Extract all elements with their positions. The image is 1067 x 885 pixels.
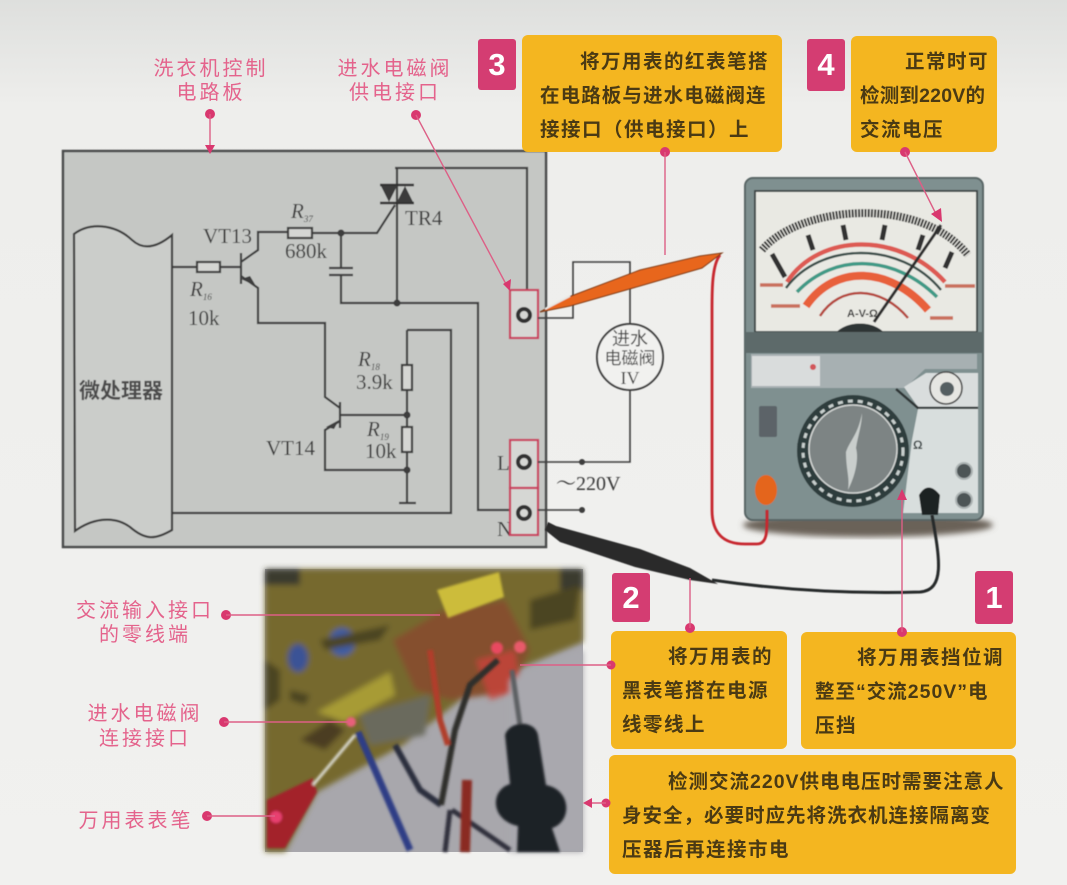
label: valve connection port: 连接接口 [99, 727, 191, 750]
component labels: N [497, 517, 512, 541]
microprocessor block [74, 226, 172, 537]
badge 2 [612, 573, 650, 622]
badge 4: 4 [817, 47, 835, 82]
label: meter probe [78, 809, 275, 832]
component labels: 10k [188, 306, 220, 330]
callout 4: 检测到220V的 [860, 84, 985, 107]
callout 3: 将万用表的红表笔搭 [580, 50, 769, 73]
zero adjust knob [930, 372, 962, 404]
lower control panel [751, 354, 978, 513]
callout 3 [522, 35, 782, 152]
callout 2: 线零线上 [622, 714, 706, 736]
safety callout: 检测交流220V供电电压时需要注意人 [668, 770, 1005, 793]
label: valve supply port: 供电接口 [349, 81, 441, 104]
component labels: 19 [380, 432, 389, 442]
label: control board [154, 57, 268, 154]
resistors [197, 228, 412, 452]
lower control panel: V [797, 442, 805, 454]
220V label: ～220V [556, 473, 621, 495]
badge 1: 1 [985, 580, 1003, 615]
pointer from callout 4 to needle [900, 147, 942, 222]
red probe body [267, 778, 317, 848]
multimeter [743, 178, 993, 537]
callout 1: 将万用表挡位调 [857, 646, 1004, 669]
safety callout: 压器后再连接市电 [622, 838, 790, 861]
callout 4: 正常时可 [905, 51, 989, 73]
label: neutral input terminal [76, 599, 440, 646]
badge 4 [807, 39, 845, 91]
component labels: TR4 [405, 206, 443, 230]
triac TR4 [380, 185, 414, 203]
panel: washing machine control circuit board [63, 151, 546, 547]
needle [874, 225, 941, 322]
photo: real circuit board with probes [265, 569, 583, 852]
callout 1: 整至“交流250V”电 [815, 680, 989, 703]
callout 1 [801, 632, 1016, 749]
component labels: 680k [285, 239, 328, 263]
meter scale window [755, 191, 977, 334]
external circuit with inlet valve [538, 262, 663, 513]
badge 2: 2 [622, 580, 640, 615]
label: valve supply port: 进水电磁阀 [338, 57, 452, 80]
black test lead [545, 515, 939, 592]
callout 3: 在电路板与进水电磁阀连 [540, 85, 767, 107]
component labels: VT13 [203, 224, 252, 248]
meter scale window: A-V-Ω [847, 308, 878, 320]
pointer from safety callout to photo [583, 798, 610, 808]
badge 1 [975, 571, 1013, 624]
label: valve supply port [338, 57, 511, 291]
pointer from callout 2 to photo [520, 660, 616, 670]
lower control panel: Ω [913, 438, 923, 452]
yellow capacitor [437, 572, 504, 618]
callout 3: 接接口（供电接口）上 [540, 119, 750, 141]
circuit wiring [172, 168, 527, 513]
terminals [510, 290, 538, 535]
component labels: 18 [371, 362, 380, 372]
label: valve connection port [88, 702, 350, 750]
inlet solenoid valve symbol: IV [620, 368, 640, 388]
callout 4: 交流电压 [860, 118, 944, 141]
component labels [188, 199, 512, 541]
microprocessor block: 微处理器 [79, 380, 163, 403]
component labels: R [367, 417, 380, 441]
inlet solenoid valve symbol: 进水 [612, 329, 648, 349]
rotary range dial [797, 395, 909, 507]
callout 1: 压挡 [815, 715, 857, 737]
callout 4 [851, 36, 997, 152]
pointer from callout 3 to red probe [660, 147, 670, 255]
component labels: 37 [303, 214, 313, 224]
inlet solenoid valve symbol: 电磁阀 [604, 349, 656, 368]
component labels: L [497, 451, 510, 475]
component labels: VT14 [266, 436, 315, 460]
component labels: 3.9k [356, 370, 393, 394]
safety callout [609, 755, 1016, 874]
component labels: R [190, 277, 203, 301]
safety callout: 身安全，必要时应先将洗衣机连接隔离变 [622, 804, 991, 827]
badge 3: 3 [488, 47, 506, 82]
badge 3 [478, 39, 516, 90]
label: control board: 洗衣机控制 [154, 57, 268, 80]
callout 2: 黑表笔搭在电源 [622, 680, 769, 702]
inlet solenoid valve symbol [597, 324, 663, 390]
red test lead [540, 253, 767, 544]
component labels: R [291, 199, 304, 223]
label: neutral input terminal: 交流输入接口 [76, 599, 214, 622]
label: meter probe: 万用表表笔 [78, 809, 194, 832]
component labels: 16 [203, 292, 212, 302]
callout 2 [611, 631, 787, 749]
pointer from callout 1 to dial [897, 489, 907, 637]
component labels: 10k [365, 439, 397, 463]
pointer from callout 2 to black probe [685, 578, 695, 633]
black probe handle [496, 724, 566, 852]
label: neutral input terminal: 的零线端 [99, 623, 191, 646]
label: valve connection port: 进水电磁阀 [88, 702, 202, 725]
callout 2: 将万用表的 [668, 646, 773, 668]
component labels: R [358, 347, 371, 371]
label: control board: 电路板 [176, 81, 246, 104]
jacks and probe plugs [755, 463, 972, 515]
